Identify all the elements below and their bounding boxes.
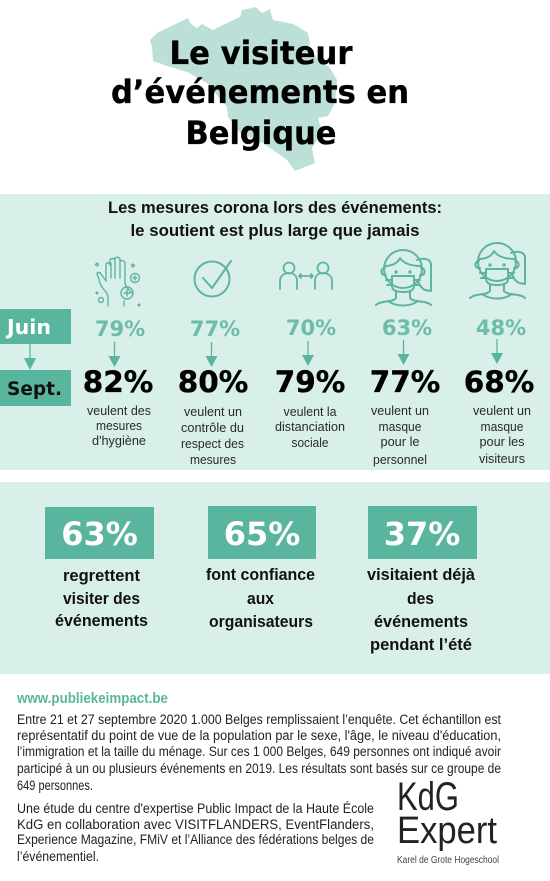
column: staff mask: 77%	[370, 365, 440, 399]
column: staff mask: veulent un	[371, 403, 429, 418]
text block: methodology: participé à un ou plusieurs événements en 2019. Les résultats sont basés sur ce groupe de	[17, 761, 501, 776]
stat: 65% trust: organisateurs	[209, 613, 313, 631]
stat: 37% visited: des	[407, 590, 434, 608]
icon: check mark	[194, 261, 231, 296]
stat: 65% trust: font confiance	[206, 566, 315, 584]
label: Sept.: Sept.	[7, 378, 62, 400]
logo: KdG Expert	[397, 775, 499, 866]
column: hygiene: d'hygiène	[92, 433, 146, 448]
label: Sept.	[0, 370, 71, 406]
column: visitor mask: 68%	[464, 365, 534, 399]
logo: KdG Expert: Expert	[397, 810, 497, 852]
column: hygiene: mesures	[96, 418, 142, 433]
map of Belgium	[150, 7, 337, 171]
text block: methodology	[17, 712, 501, 793]
icon: person with mask, visitors	[470, 243, 525, 298]
text block: study credits	[17, 801, 374, 864]
logo: KdG Expert: Karel de Grote Hogeschool	[397, 855, 499, 866]
text block: study credits: Experience Magazine, FMiV et l’Alliance des fédérations belges de	[17, 832, 374, 847]
label: Juin: Juin	[5, 315, 51, 339]
title: Belgique	[186, 114, 336, 152]
stat: 65% trust: 65%	[224, 515, 300, 553]
text block: study credits: KdG en collaboration avec VISITFLANDERS, EventFlanders,	[17, 817, 374, 832]
column: control: respect des	[181, 436, 244, 451]
column: control: contrôle du	[181, 420, 244, 435]
website link: www.publiekeimpact.be	[16, 691, 168, 707]
text block: methodology: 649 personnes.	[17, 778, 93, 793]
title: d’événements en	[111, 73, 409, 111]
stat: 37% visited	[367, 506, 477, 654]
column: visitor mask	[464, 316, 534, 466]
column: staff mask	[370, 316, 440, 467]
text block: study credits: l’événementiel.	[17, 849, 99, 864]
column: distancing: distanciation	[275, 419, 345, 434]
column: hygiene	[83, 317, 153, 448]
column: distancing: sociale	[292, 435, 328, 450]
stat: 63% regret: événements	[55, 612, 148, 630]
icon: hand hygiene	[96, 257, 140, 306]
column: staff mask: 63%	[382, 316, 432, 340]
column: visitor mask: pour les	[480, 434, 525, 449]
panel: key figures	[0, 482, 550, 674]
panel heading	[108, 199, 442, 240]
header: map and title	[111, 7, 409, 171]
text block: study credits: Une étude du centre d'expertise Public Impact de la Haute École	[17, 801, 374, 816]
icon: person with mask, staff	[376, 250, 431, 306]
stat: 37% visited: visitaient déjà	[367, 566, 476, 584]
column: hygiene: veulent des	[87, 403, 151, 418]
title	[111, 34, 409, 152]
stat: 65% trust: aux	[247, 590, 275, 608]
stat: 63% regret: visiter des	[63, 590, 140, 608]
panel heading: le soutient est plus large que jamais	[130, 222, 420, 240]
column: control	[178, 317, 248, 467]
text block: methodology: représentatif du point de vue de la population par le sexe, l'âge, le niveau d'éducation,	[17, 728, 501, 743]
column: control: veulent un	[184, 404, 242, 419]
label: Juin	[0, 309, 71, 344]
column: hygiene: 79%	[95, 317, 145, 341]
logo: KdG Expert: KdG	[397, 775, 459, 819]
column: control: mesures	[190, 452, 236, 467]
column: visitor mask: masque	[480, 419, 524, 434]
column: control: 77%	[190, 317, 240, 341]
text block: methodology: Entre 21 et 27 septembre 2020 1.000 Belges remplissaient l’enquête. Cet échantillon est	[17, 712, 501, 727]
stat: 37% visited: événements	[374, 613, 468, 631]
column: staff mask: masque	[378, 419, 422, 434]
stat: 63% regret: 63%	[61, 515, 138, 553]
stat: 63% regret	[45, 507, 154, 630]
panel: corona measures	[0, 194, 550, 470]
column: control: 80%	[178, 365, 248, 399]
stat: 65% trust	[206, 506, 316, 631]
column: distancing: 79%	[275, 365, 345, 399]
column: visitor mask: 48%	[476, 316, 526, 340]
column: staff mask: pour le	[380, 434, 420, 449]
column: distancing: 70%	[286, 316, 336, 340]
column: visitor mask: visiteurs	[479, 451, 525, 466]
icon: social distancing	[280, 262, 332, 289]
panel heading: Les mesures corona lors des événements:	[108, 199, 442, 217]
text block: methodology: l’immigration et la taille du ménage. Sur ces 1 000 Belges, 649 personnes ont indiqué avoir	[17, 744, 501, 759]
stat: 37% visited: pendant l’été	[370, 636, 472, 654]
title: Le visiteur	[170, 34, 353, 72]
column: staff mask: personnel	[373, 452, 427, 467]
stat: 37% visited: 37%	[384, 515, 460, 553]
column: hygiene: 82%	[83, 365, 153, 399]
column: visitor mask: veulent un	[473, 403, 531, 418]
column: distancing: veulent la	[284, 404, 337, 419]
column: distancing	[275, 316, 345, 450]
arrow: June to September	[24, 344, 36, 370]
stat: 63% regret: regrettent	[63, 567, 141, 585]
